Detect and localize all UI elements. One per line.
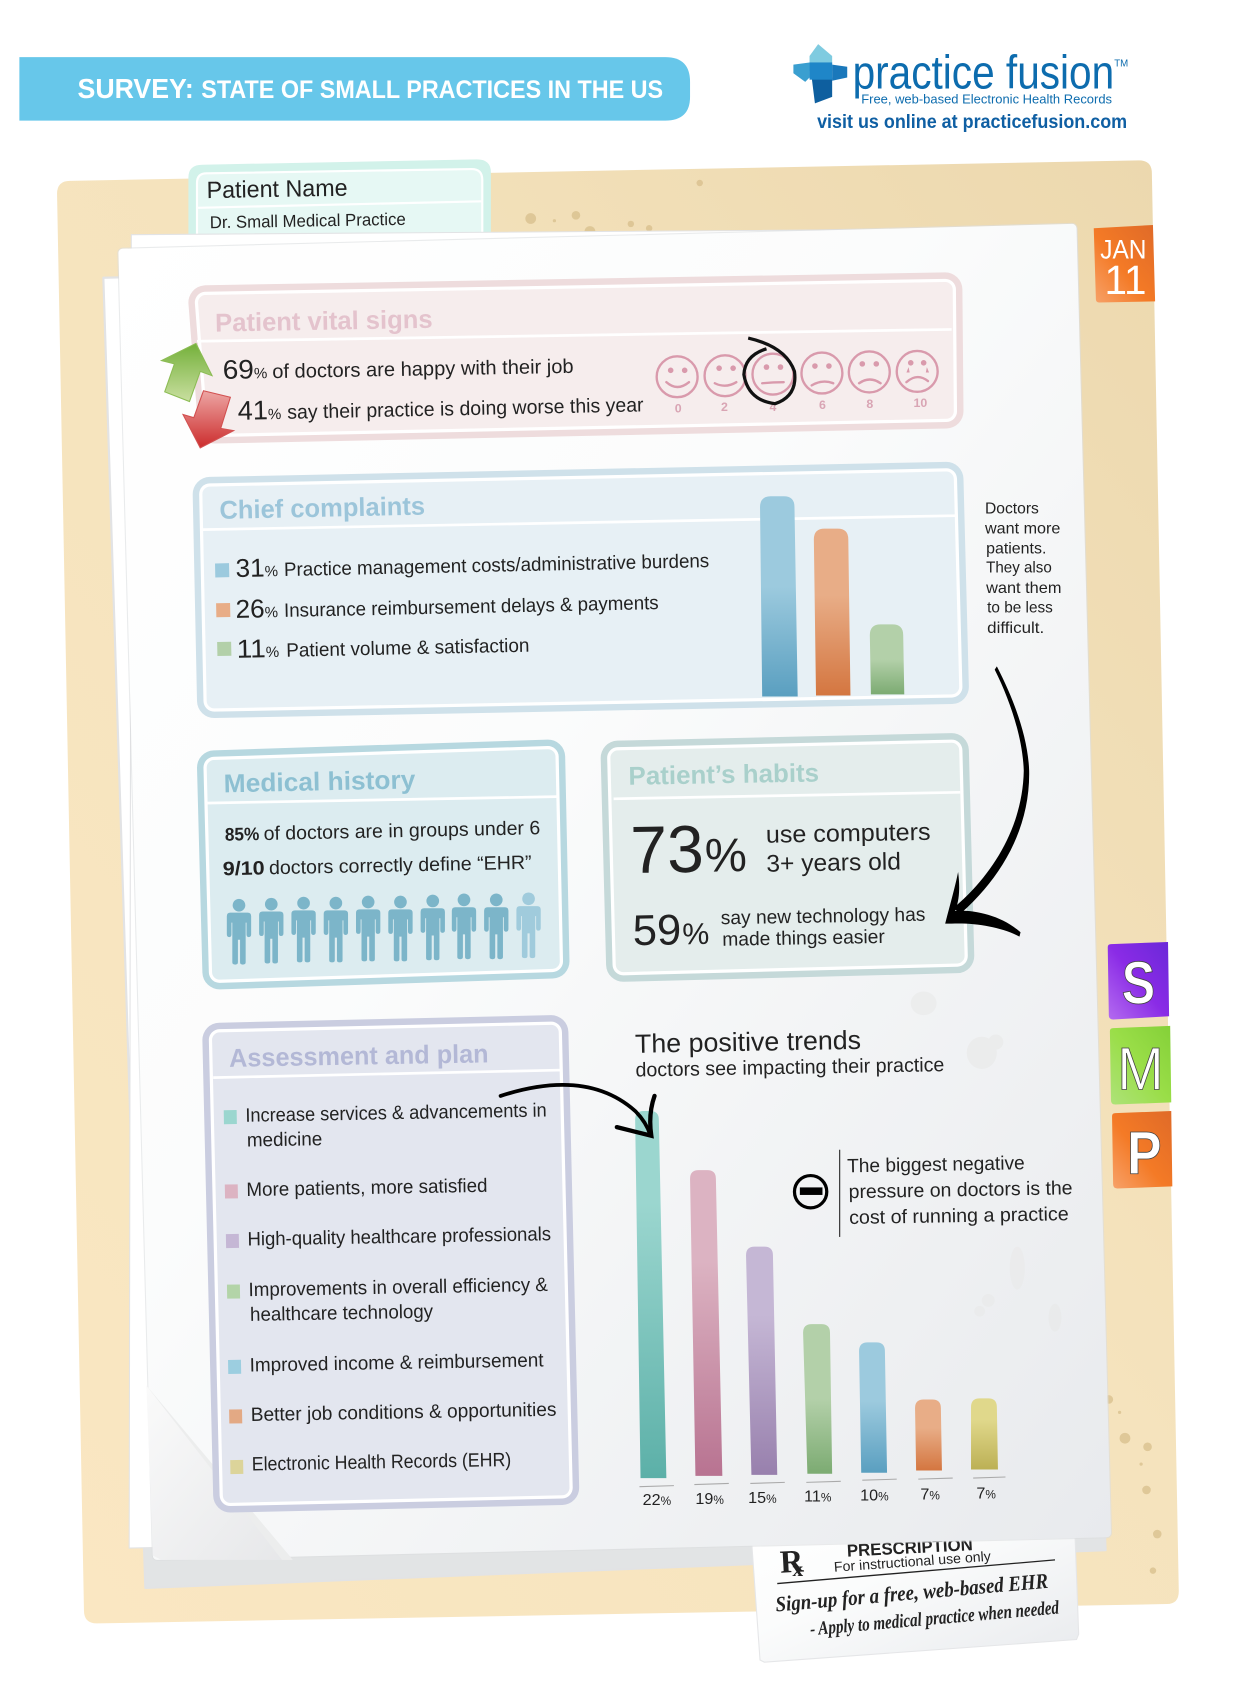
side note: doctors want more patients [984,501,1061,637]
side note: doctors want more patients: difficult. [987,620,1044,637]
header banner: STATE OF SMALL PRACTICES IN THE US [201,76,663,104]
item: improvements in efficiency: Improvements in overall efficiency & [248,1274,548,1301]
stat: 41 percent worse: 41 [237,395,268,426]
axis value labels: 15% [748,1489,777,1507]
item: more patients: More patients, more satisfied [246,1175,488,1201]
item: improved income: Improved income & reimbursement [249,1349,544,1376]
stat: 59 percent: say new technology has [721,904,926,929]
axis value labels: 22% [643,1491,672,1509]
callout: biggest negative pressure: pressure on doctors is the [848,1177,1073,1203]
calendar tab: JAN 11 [1094,225,1155,303]
back sheets of paper [103,228,1106,1588]
panel: patient's habits [614,750,960,965]
stat: 59 percent [632,902,926,955]
axis value labels: 7% [976,1485,996,1503]
item: 26 percent: 26 [235,595,265,624]
logo: practice fusion: TM [1114,59,1128,70]
main sheet of paper [123,228,1107,1560]
arrow: red down [183,391,234,448]
calendar tab: JAN 11: JAN [1100,234,1146,264]
scale labels: 2 [721,400,728,414]
icon: row of ten people [227,892,541,965]
scale labels: 10 [914,396,927,410]
calendar tab: JAN 11: 11 [1105,257,1146,303]
icon: pain scale faces [657,351,938,397]
item: 26 percent: % [265,604,278,621]
stat: 59 percent: 59 [632,906,682,955]
axis value labels: 11% [804,1488,832,1506]
heading: patient's habits: Patient’s habits [628,759,819,791]
axis value labels [643,1485,996,1509]
arrow: curved to first bar [501,1085,655,1136]
stat: 59 percent: % [682,918,710,951]
tab: P: P [1127,1118,1162,1186]
stat: 9 of 10: doctors correctly define “EHR” [269,852,532,879]
axis value labels: 19% [695,1490,724,1508]
prescription note: Sign-up for a free, web-based EHR [775,1569,1049,1617]
heading: patient vital signs: Patient vital signs [215,306,433,338]
panel: patient vital signs [161,290,952,448]
scale labels: 4 [769,400,776,414]
item: increase services: medicine [247,1128,322,1151]
stat: 73 percent: % [704,829,747,883]
stat: 59 percent: made things easier [722,926,886,951]
stat: 41 percent worse [237,387,644,426]
item: 31 percent: 31 [235,554,265,583]
callout: biggest negative pressure: cost of running a practice [849,1203,1069,1229]
heading: the positive trends: doctors see impacting their practice [635,1054,945,1082]
tab: S [1108,942,1169,1019]
stat: 85 percent: of doctors are in groups under 6 [263,817,540,845]
stat: 69 percent happy: of doctors are happy with their job [272,356,574,383]
stat: 41 percent worse: say their practice is doing worse this year [287,394,644,424]
heading: the positive trends: The positive trends [635,1025,861,1059]
scale labels: 8 [866,397,873,411]
prescription note [750,1518,1079,1662]
side note: doctors want more patients: They also [986,560,1052,577]
item: 31 percent: % [265,563,278,580]
heading: chief complaints: Chief complaints [219,493,425,525]
side note: doctors want more patients: Doctors [985,501,1039,518]
item: better job conditions: Better job conditions & opportunities [251,1399,557,1426]
bar chart: complaints [760,496,904,697]
stat: 73 percent: 73 [630,813,704,888]
scale labels: 0 [675,401,682,415]
side note: doctors want more patients: patients. [986,540,1046,557]
tab: M: M [1117,1034,1164,1102]
prescription note: R [779,1543,805,1580]
item: 11 percent: 11 [236,635,266,664]
stat: 69 percent happy [222,349,574,385]
item: improvements in efficiency [227,1274,549,1326]
item: improvements in efficiency: healthcare technology [250,1301,434,1326]
item: 11 percent: Patient volume & satisfaction [286,635,530,662]
scale labels: 6 [819,398,826,412]
item: increase services [224,1099,547,1152]
stat: 73 percent: 3+ years old [766,848,901,878]
item: 26 percent [216,587,659,624]
item: 11 percent: % [266,644,279,661]
folder tab: patient name: Dr. Small Medical Practice [210,209,406,232]
item: 26 percent: Insurance reimbursement delays & payments [284,592,659,622]
stat: 73 percent [630,809,931,888]
prescription note: x [792,1557,803,1581]
panel: chief complaints [202,479,956,701]
hand-drawn circle around face 4 [744,338,795,404]
logo: practice fusion: visit us online at practicefusion.com [817,111,1127,133]
icon: minus in circle [794,1176,827,1208]
header banner: SURVEY: [78,73,194,104]
item: high-quality professionals: High-quality healthcare professionals [247,1223,551,1251]
stat: 85 percent: 85% [225,823,260,845]
bar chart: positive trends [635,1111,1005,1509]
item: 31 percent [215,545,709,583]
panel: medical history [205,757,558,972]
heading: medical history: Medical history [223,766,416,798]
prescription note: - Apply to medical practice when needed [809,1598,1060,1640]
stat: 41 percent worse: % [268,406,282,423]
side note: doctors want more patients: want them [985,580,1061,597]
axis value labels: 10% [860,1487,889,1505]
heading: assessment and plan: Assessment and plan [229,1040,489,1073]
stat: 73 percent: use computers [766,819,931,849]
logo: practice fusion: Free, web-based Electronic Health Records [861,91,1112,106]
tab: P [1112,1111,1172,1188]
callout: biggest negative pressure: The biggest negative [847,1152,1025,1177]
item: 31 percent: Practice management costs/administrative burdens [284,550,709,581]
logo: practice fusion: practice fusion [853,46,1114,99]
folder [57,160,1179,1623]
item: 11 percent [217,630,530,664]
header banner [19,57,690,121]
tab: S: S [1122,948,1155,1016]
heading: the positive trends [635,1023,945,1082]
stat: 9 of 10: 9/10 [222,857,265,880]
folder tab: patient name: Patient Name [206,176,348,204]
callout: biggest negative pressure [840,1150,1073,1237]
prescription note: For instructional use only [833,1548,991,1575]
panel: assessment and plan [213,1032,562,1495]
prescription note: PRESCRIPTION [846,1534,973,1561]
side note: doctors want more patients: to be less [987,600,1053,617]
logo: practice fusion [793,44,1128,133]
stat: 69 percent happy: % [254,365,268,382]
scale labels [675,396,927,415]
arrow: green up [161,343,212,402]
item: increase services: Increase services & advancements in [245,1099,547,1127]
arrow: large curved black [945,666,1029,937]
side note: doctors want more patients: want more [984,520,1060,537]
item: electronic health records: Electronic Health Records (EHR) [252,1449,511,1476]
folder tab: patient name [188,159,491,258]
stat: 69 percent happy: 69 [222,354,254,385]
axis value labels: 7% [920,1486,940,1504]
